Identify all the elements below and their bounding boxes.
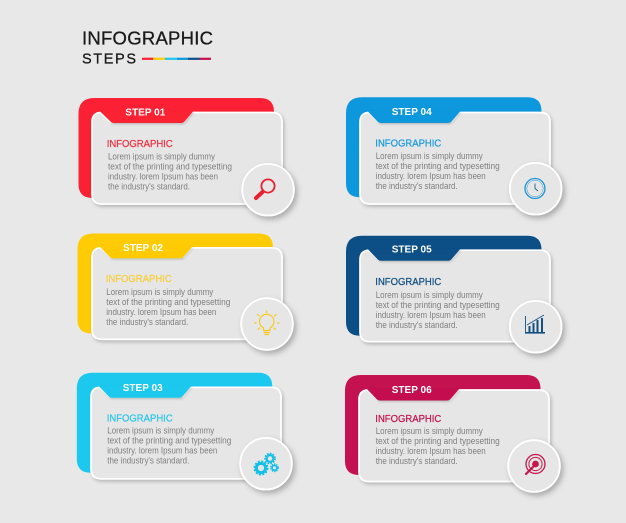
body text: text of the printing and typesetting — [376, 300, 500, 310]
icon: target — [526, 454, 545, 474]
step tab — [368, 111, 460, 123]
colored back plate — [78, 234, 273, 334]
step tab — [100, 111, 194, 123]
body text: Lorem ipsum is simply dummy — [376, 426, 483, 436]
step label: STEP 05 — [392, 244, 432, 256]
step tab — [368, 249, 460, 261]
panel: step 02 — [78, 234, 293, 350]
colored back plate — [346, 236, 542, 336]
body text: industry. lorem Ipsum has been — [107, 446, 217, 456]
panel: step 03 — [77, 373, 292, 490]
colored back plate — [78, 98, 274, 198]
panel: step 04 — [346, 97, 562, 214]
heading: INFOGRAPHIC — [375, 276, 442, 288]
panel: step 06 — [345, 375, 560, 492]
body text: text of the printing and typesetting — [376, 436, 500, 446]
heading: INFOGRAPHIC — [375, 138, 442, 150]
step tab — [366, 388, 460, 400]
icon: bar chart — [525, 315, 545, 334]
body text: the industry's standard. — [376, 320, 458, 330]
step label: STEP 06 — [392, 384, 432, 396]
colored back plate — [77, 373, 272, 473]
title — [82, 28, 213, 68]
heading: INFOGRAPHIC — [107, 413, 173, 425]
icon: magnifier — [256, 179, 275, 198]
body text — [106, 287, 230, 327]
icon: gears — [254, 454, 278, 474]
panel: step 01 — [78, 98, 294, 216]
body text: industry. lorem Ipsum has been — [108, 172, 218, 182]
body text: text of the printing and typesetting — [107, 436, 231, 446]
body text: industry. lorem Ipsum has been — [376, 171, 486, 181]
front card — [359, 390, 549, 482]
front card — [360, 250, 550, 342]
step tab — [98, 386, 192, 398]
body text: the industry's standard. — [108, 182, 190, 192]
colour bar — [142, 58, 211, 60]
body text: industry. lorem Ipsum has been — [106, 307, 216, 317]
icon circle — [508, 440, 560, 492]
body text: Lorem ipsum is simply dummy — [376, 151, 483, 161]
body text: Lorem ipsum is simply dummy — [108, 152, 215, 162]
front card — [91, 387, 281, 479]
body text — [376, 290, 500, 330]
body text: Lorem ipsum is simply dummy — [106, 287, 214, 297]
icon circle — [242, 164, 294, 216]
icon circle — [241, 298, 293, 350]
icon: clock — [525, 178, 545, 198]
step label: STEP 03 — [123, 382, 163, 394]
step label: STEP 01 — [125, 106, 165, 118]
body text: industry. lorem Ipsum has been — [376, 446, 486, 456]
icon circle — [240, 438, 292, 490]
body text — [107, 426, 231, 466]
icon circle — [510, 163, 562, 214]
body text: the industry's standard. — [376, 456, 458, 466]
body text: Lorem ipsum is simply dummy — [107, 426, 215, 436]
body text: the industry's standard. — [376, 181, 458, 191]
colored back plate — [345, 375, 540, 475]
body text: text of the printing and typesetting — [376, 161, 500, 171]
front card — [92, 248, 282, 339]
heading: INFOGRAPHIC — [107, 138, 173, 150]
body text: the industry's standard. — [107, 456, 189, 466]
title line 1: INFOGRAPHIC — [82, 28, 213, 48]
body text — [108, 152, 232, 192]
step label: STEP 04 — [392, 106, 432, 118]
body text: Lorem ipsum is simply dummy — [376, 290, 483, 300]
title line 2: STEPS — [82, 52, 136, 68]
body text — [376, 426, 500, 466]
body text: the industry's standard. — [106, 317, 188, 327]
panel: step 05 — [346, 236, 562, 353]
heading: INFOGRAPHIC — [375, 413, 442, 425]
front card — [92, 112, 282, 204]
body text: text of the printing and typesetting — [108, 162, 232, 172]
icon circle — [510, 301, 562, 353]
body text: text of the printing and typesetting — [106, 297, 230, 307]
front card — [360, 112, 550, 204]
colored back plate — [346, 97, 542, 197]
step tab — [100, 246, 192, 258]
body text: industry. lorem Ipsum has been — [376, 310, 486, 320]
step label: STEP 02 — [123, 242, 163, 254]
body text — [376, 151, 500, 191]
heading: INFOGRAPHIC — [106, 273, 172, 285]
icon: light bulb — [254, 311, 279, 334]
